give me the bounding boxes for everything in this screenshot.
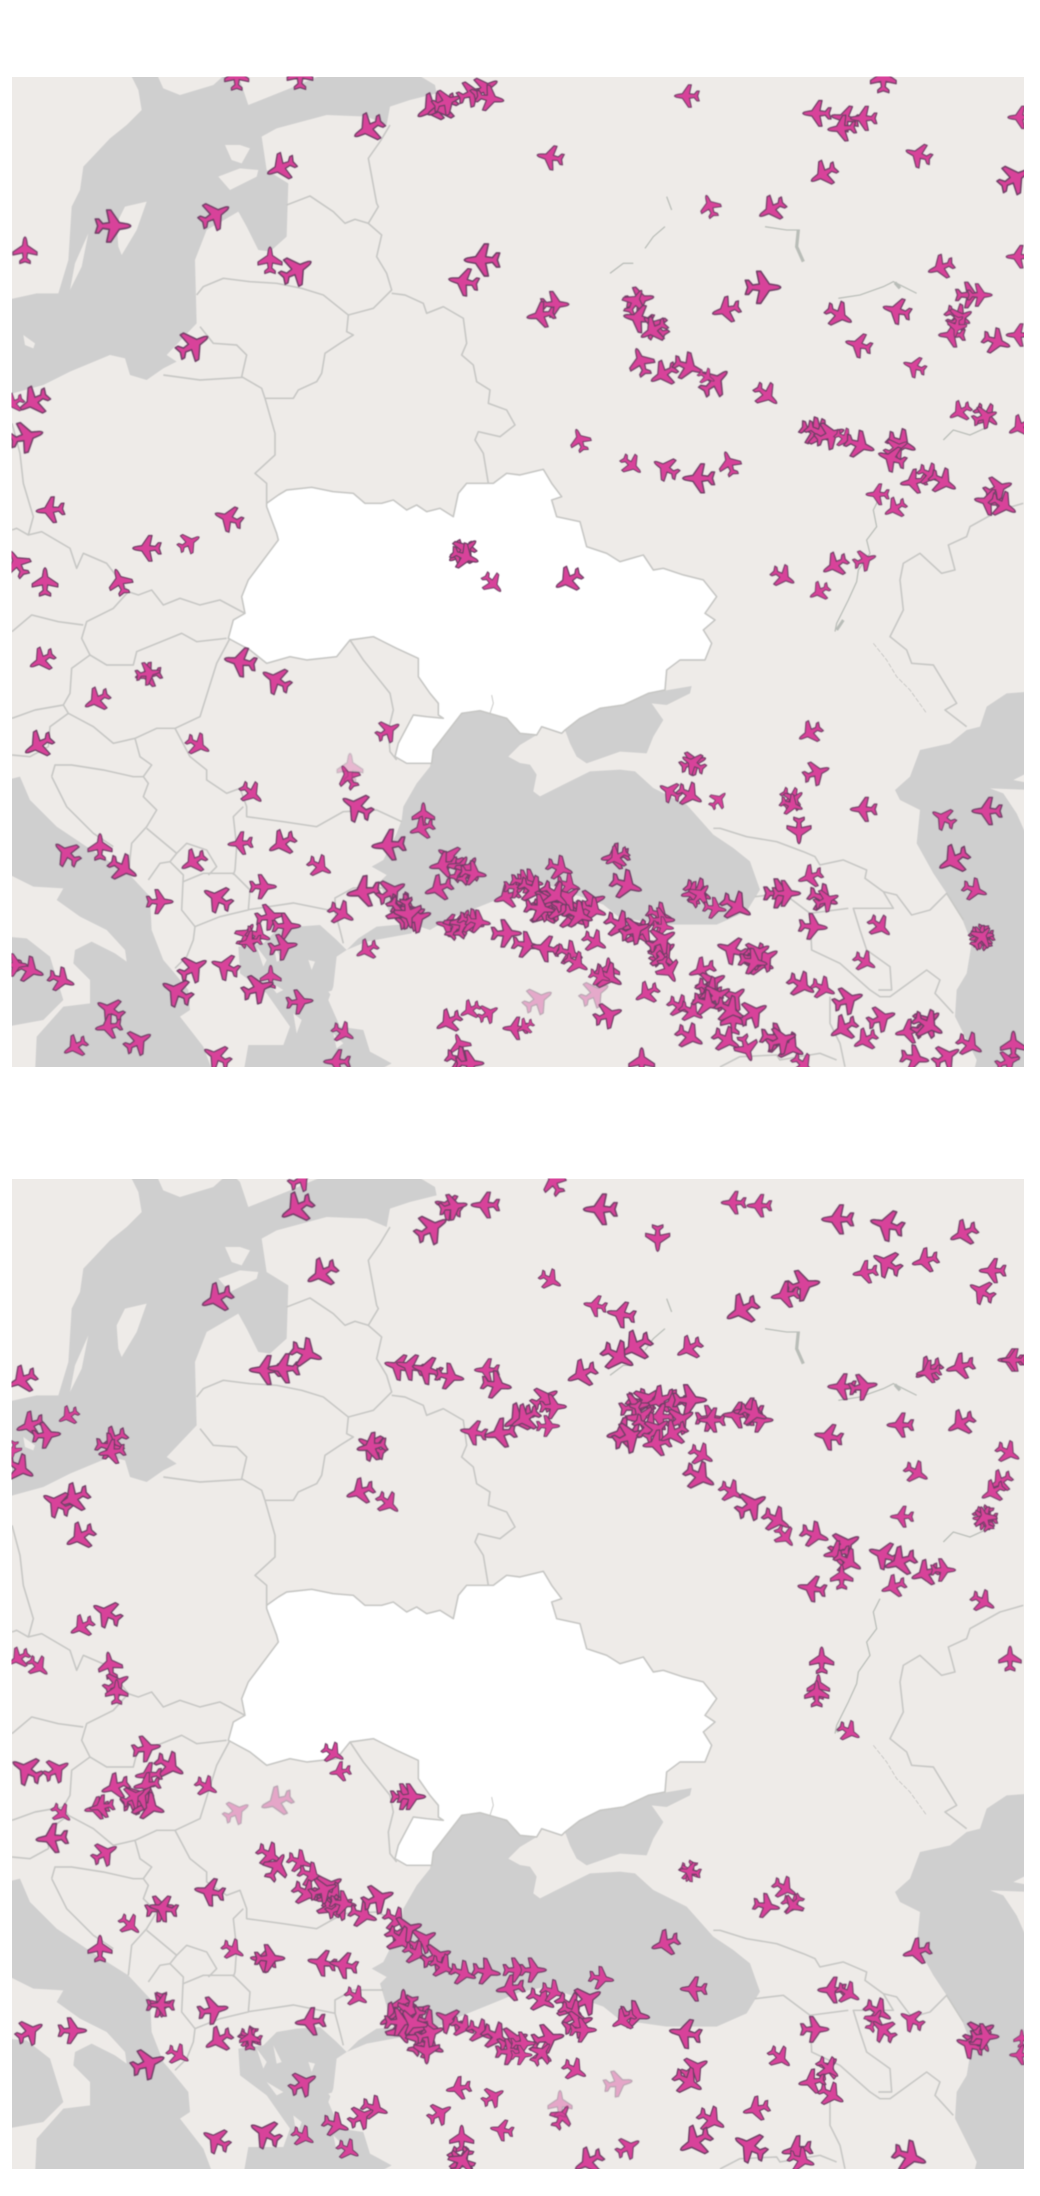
- plane markers, top map: [0, 61, 1037, 1081]
- panel: air traffic map, top: [0, 61, 1037, 1081]
- plane markers, bottom map: [0, 1162, 1031, 2181]
- panel: air traffic map, bottom: [0, 1162, 1031, 2181]
- faded planes, bottom map: [219, 1783, 634, 2117]
- faded planes, top map: [521, 982, 609, 1016]
- base map: Europe with Ukraine highlighted: [7, 70, 1030, 1073]
- base map: Europe with Ukraine highlighted: [7, 1172, 1030, 2175]
